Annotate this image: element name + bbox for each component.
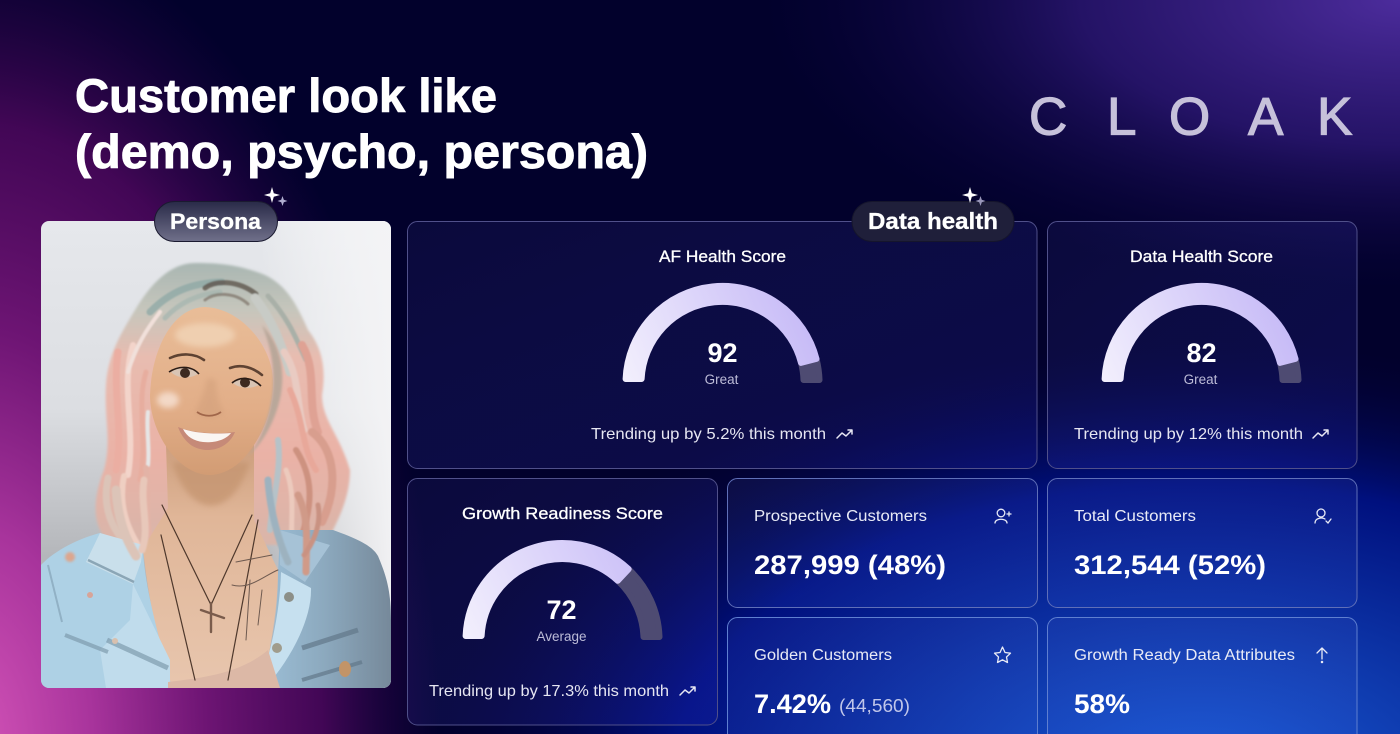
score value: 72 [546,595,577,625]
trend text: Trending up by 5.2% this month [591,426,826,443]
title [75,69,648,178]
hair over jacket [116,480,319,572]
necklaces and tattoo [161,505,278,680]
badge: Persona [154,187,288,242]
card: Golden Customers: (44,560) [839,696,910,716]
card: Prospective Customers [728,478,1038,608]
score value: 92 [707,338,738,368]
icon: trending up [837,430,852,438]
badge: Data health [852,187,1014,242]
icon: arrow up [1317,648,1327,663]
trend text: Trending up by 12% this month [1074,426,1303,443]
top fabric [168,650,280,688]
icon: trending up [680,687,695,695]
heading: AF Health Score [659,247,786,266]
badge: Persona: Persona [170,209,262,234]
card: Golden Customers: Golden Customers [754,647,892,664]
card: Growth Ready Data Attributes: Growth Ready Data Attributes [1074,647,1295,664]
icon: sparkles [962,187,986,206]
trend text: Trending up by 17.3% this month [429,683,669,700]
card: Prospective Customers: Prospective Customers [754,508,927,525]
score value: 82 [1186,338,1217,368]
heading: Data Health Score [1130,247,1273,266]
score label: Great [705,372,739,387]
title: (demo, psycho, persona) [75,125,648,178]
face [150,307,273,475]
card: Total Customers [1048,478,1357,608]
panel: Growth Readiness Score [408,478,718,725]
icon: sparkles [264,187,288,206]
title: Customer look like [75,69,497,122]
neck and chest [143,445,278,688]
card: Golden Customers [728,618,1038,734]
gauge: 92 [626,286,820,380]
heading: Growth Readiness Score [462,504,663,523]
facial features [169,354,262,450]
panel: persona photo [41,221,391,688]
icon: user check [1315,509,1331,523]
icon: star [994,647,1010,662]
icon: user plus [995,509,1011,523]
score label: Great [1184,372,1218,387]
gauge: 72 [466,543,660,637]
card: Prospective Customers: 287,999 (48%) [754,550,946,580]
icon: trending up [1313,430,1328,438]
hair colour streaks [106,282,332,548]
card: Growth Ready Data Attributes: 58% [1074,689,1130,719]
panel: Data Health Score [1048,222,1357,468]
badge: Data health: Data health [868,208,998,234]
score label: Average [536,629,587,644]
logo: CLOAK: CLOAK [1029,88,1352,146]
jacket left [41,533,172,688]
gauge: 82 [1105,286,1298,380]
card: Total Customers: 312,544 (52%) [1074,550,1266,580]
hair back [96,263,350,558]
card: Total Customers: Total Customers [1074,508,1196,525]
panel: AF Health Score [408,222,1037,468]
card: Golden Customers: 7.42% [754,689,831,719]
card: Growth Ready Data Attributes [1048,618,1357,734]
jacket right [272,530,391,688]
